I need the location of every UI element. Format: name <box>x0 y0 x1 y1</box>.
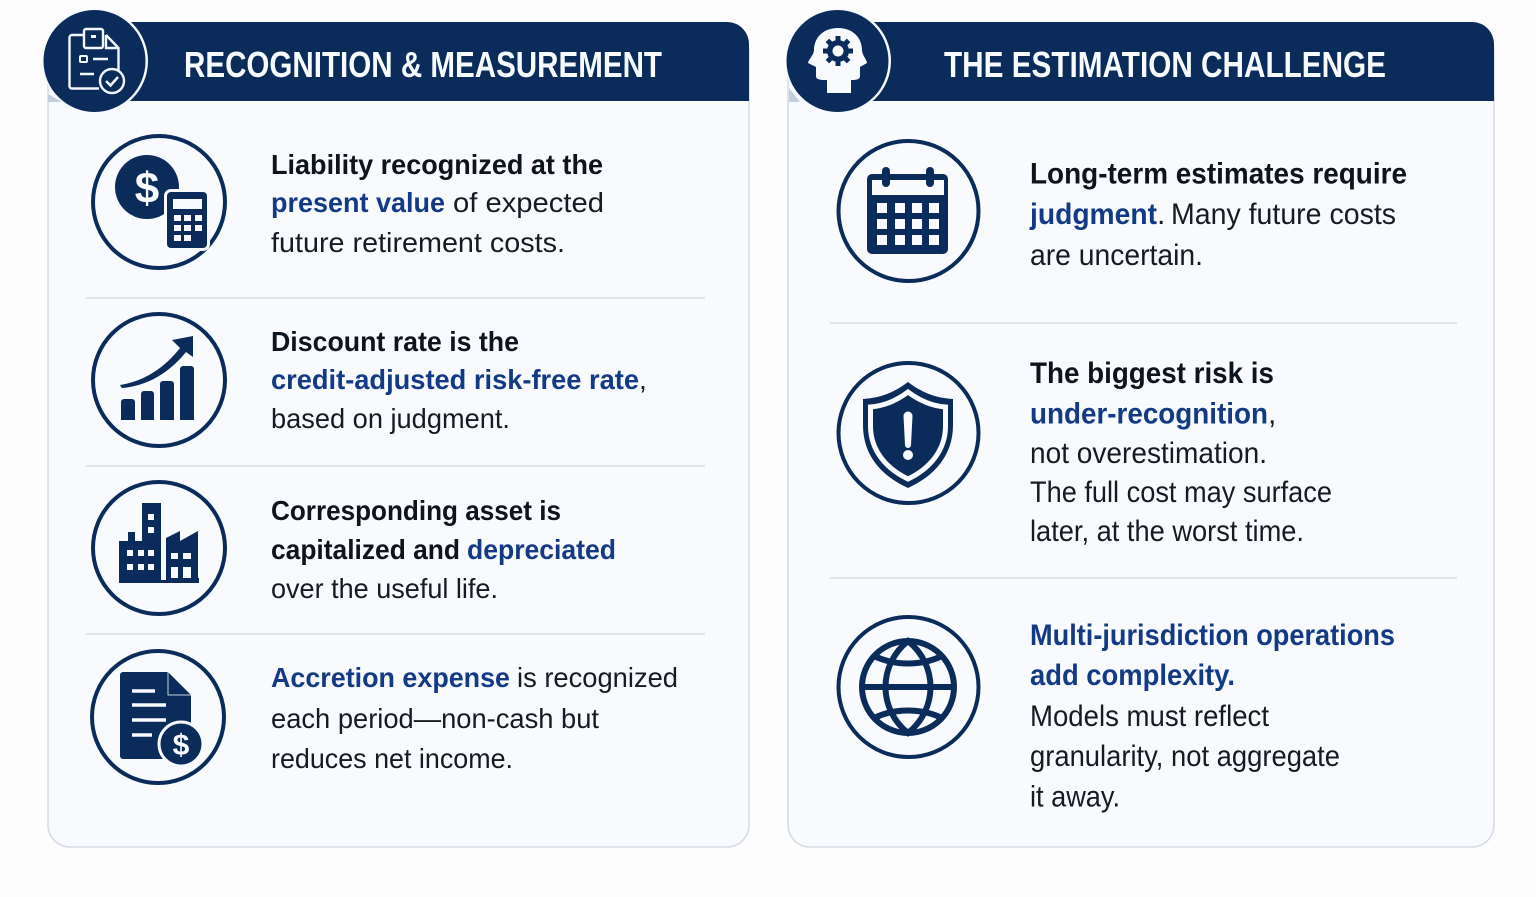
text: long-term estimates: Many future costs <box>1171 198 1396 231</box>
item: corresponding asset <box>93 482 616 614</box>
text: corresponding asset: capitalized and <box>271 534 460 565</box>
icon: rising bar chart <box>93 314 225 446</box>
text: long-term estimates: are uncertain. <box>1030 239 1203 272</box>
text: long-term estimates: . <box>1157 198 1165 231</box>
text: accretion expense <box>271 662 678 774</box>
text: multi-jurisdiction <box>1030 619 1395 814</box>
text: accretion expense: is recognized <box>517 662 678 693</box>
icon: head with gear <box>785 8 891 114</box>
panel: recognition and measurement <box>42 8 749 847</box>
icon: document with dollar: $ <box>173 729 190 762</box>
text: discount rate: based on judgment. <box>271 403 510 434</box>
item: accretion expense <box>92 651 678 783</box>
text: long-term estimates: Long-term estimates require <box>1030 158 1407 190</box>
text: multi-jurisdiction: granularity, not aggregate <box>1030 740 1340 773</box>
divider lines <box>86 298 705 634</box>
text: biggest risk <box>1030 357 1332 548</box>
text: present value: of expected <box>453 187 604 218</box>
text: present value: future retirement costs. <box>271 227 565 258</box>
header bar: estimation <box>840 22 1494 101</box>
text: present value <box>271 149 604 258</box>
panel: the estimation challenge <box>785 8 1494 847</box>
item: multi-jurisdiction <box>838 617 1395 814</box>
divider lines <box>830 323 1457 578</box>
text: multi-jurisdiction: add complexity. <box>1030 659 1235 692</box>
icon: clipboard checklist <box>42 8 148 114</box>
text: biggest risk: not overestimation. <box>1030 437 1267 470</box>
text: present value: Liability recognized at the <box>271 149 603 180</box>
icon: dollar and calculator <box>93 136 225 268</box>
text: discount rate: , <box>639 364 647 395</box>
icon: dollar and calculator: $ <box>135 164 159 213</box>
item: present value <box>93 136 604 268</box>
text: biggest risk: The biggest risk is <box>1030 357 1274 390</box>
text: multi-jurisdiction: it away. <box>1030 780 1120 814</box>
heading: the estimation challenge: THE ESTIMATION CHALLENGE <box>944 44 1386 85</box>
text: long-term estimates <box>1029 158 1407 272</box>
text: corresponding asset: Corresponding asset is <box>271 495 561 526</box>
text: discount rate: credit-adjusted risk-free rate <box>271 364 639 395</box>
text: present value: present value <box>271 187 445 218</box>
text: discount rate <box>271 326 647 434</box>
text: biggest risk: The full cost may surface <box>1030 476 1332 509</box>
item: long-term estimates <box>838 141 1407 281</box>
text: accretion expense: each period—non-cash but <box>271 703 599 734</box>
text: corresponding asset <box>271 495 616 604</box>
text: biggest risk: later, at the worst time. <box>1030 515 1304 548</box>
text: accretion expense: reduces net income. <box>271 743 513 774</box>
icon: factory buildings <box>93 482 225 614</box>
text: multi-jurisdiction: Multi-jurisdiction operations <box>1030 619 1395 652</box>
heading: recognition and measurement: RECOGNITION & MEASUREMENT <box>184 44 662 85</box>
icon: shield with exclamation <box>838 363 978 503</box>
icon: globe <box>838 617 978 757</box>
text: accretion expense: Accretion expense <box>271 662 510 693</box>
text: corresponding asset: over the useful life. <box>271 573 498 604</box>
icon: document with dollar <box>92 651 224 783</box>
item: discount rate <box>93 314 647 446</box>
text: corresponding asset: depreciated <box>467 534 616 565</box>
text: long-term estimates: judgment <box>1029 198 1157 231</box>
text: biggest risk: under-recognition <box>1030 398 1268 430</box>
text: discount rate: Discount rate is the <box>271 326 519 357</box>
header bar: recognition <box>100 22 749 101</box>
text: biggest risk: , <box>1268 398 1276 430</box>
text: multi-jurisdiction: Models must reflect <box>1030 700 1270 733</box>
item: biggest risk <box>838 357 1332 548</box>
icon: calendar <box>838 141 978 281</box>
